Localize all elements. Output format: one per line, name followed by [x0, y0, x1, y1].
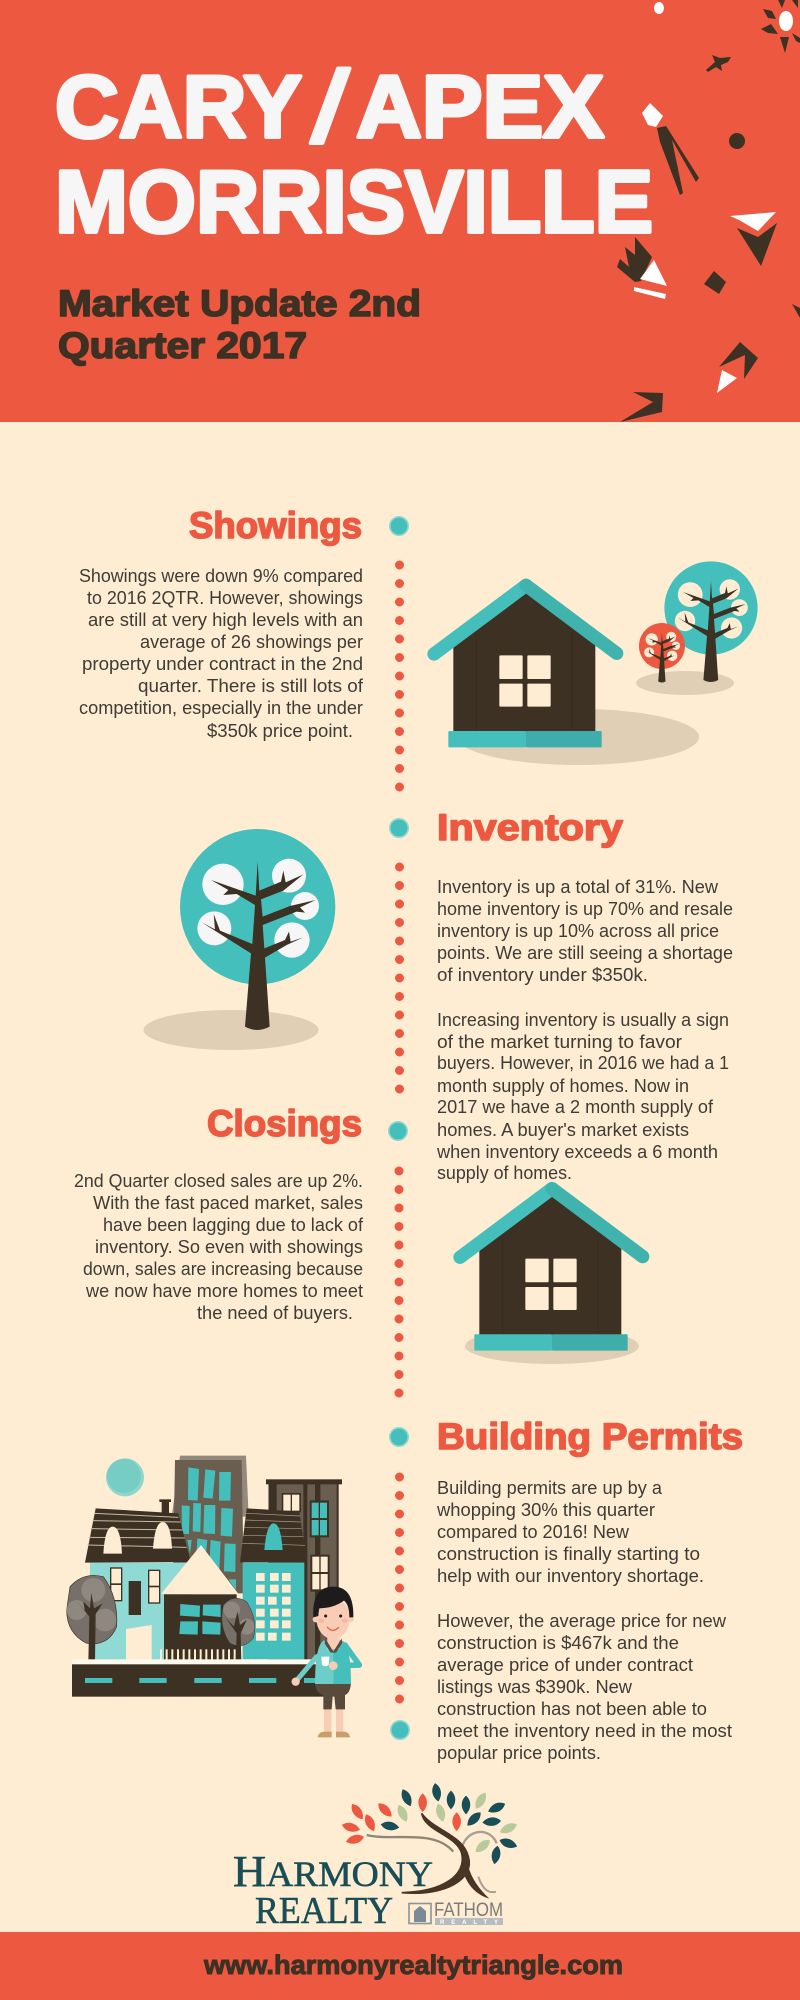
- logo wordmark: REALTY: [255, 1890, 393, 1932]
- heading: showings: Showings: [189, 505, 362, 546]
- text: inventory body: when inventory exceeds a 6 month: [436, 1141, 718, 1162]
- fathom realty badge: FATHOM: [434, 1900, 503, 1921]
- fathom realty badge: REALTY: [440, 1920, 498, 1926]
- title: CARY: [55, 57, 302, 156]
- text: showings body: average of 26 showings per: [140, 631, 363, 652]
- text: building permits body: whopping 30% this quarter: [436, 1499, 655, 1520]
- logo wordmark: [233, 1847, 433, 1932]
- text: building permits body: help with our inventory shortage.: [437, 1565, 704, 1586]
- panel: building permits: [436, 1416, 743, 1763]
- text: showings body: quarter. There is still lots of: [138, 675, 364, 696]
- text: building permits body: [436, 1477, 732, 1763]
- illustration: house with shadow: [434, 585, 699, 765]
- logo wordmark: HARMONY: [233, 1847, 433, 1896]
- logo: harmony realty: [233, 1782, 519, 1932]
- text: building permits body: construction has not been able to: [437, 1698, 707, 1719]
- heading: building permits: Building Permits: [437, 1416, 743, 1457]
- heading: closings: Closings: [207, 1103, 362, 1144]
- text: closings body: With the fast paced market, sales: [93, 1192, 363, 1213]
- tower: [172, 1456, 249, 1593]
- text: inventory body: inventory is up 10% across all price: [437, 920, 719, 941]
- text: closings body: inventory. So even with showings: [95, 1236, 363, 1257]
- heading: inventory: Inventory: [437, 807, 623, 848]
- teal building: [240, 1508, 307, 1659]
- text: closings body: we now have more homes to meet: [85, 1280, 363, 1301]
- illustration: large tree: [144, 829, 335, 1050]
- center house: [160, 1545, 239, 1660]
- title: [55, 52, 653, 251]
- panel: closings: [74, 1103, 364, 1323]
- panel: inventory: [436, 807, 733, 1183]
- text: showings body: are still at very high levels with an: [88, 609, 363, 630]
- text: closings body: the need of buyers.: [197, 1302, 353, 1323]
- text: inventory body: of inventory under $350k.: [437, 964, 648, 985]
- gray trees: [67, 1575, 255, 1662]
- panel: showings: [79, 505, 364, 741]
- illustration: two small trees: [636, 561, 758, 695]
- tall building: [266, 1479, 342, 1660]
- text: closings body: 2nd Quarter closed sales are up 2%.: [74, 1170, 363, 1191]
- text: closings body: down, sales are increasing because: [83, 1258, 363, 1279]
- timeline: dotted red line with teal markers: [389, 517, 409, 1739]
- text: showings body: $350k price point.: [207, 720, 353, 741]
- text: closings body: have been lagging due to lack of: [103, 1214, 364, 1235]
- subtitle: Quarter 2017: [58, 325, 307, 366]
- decorative confetti shapes: [617, 0, 800, 422]
- illustration: second house: [460, 1189, 643, 1364]
- text: inventory body: buyers. However, in 2016 we had a 1: [437, 1052, 729, 1073]
- text: building permits body: construction is finally starting to: [437, 1543, 700, 1564]
- footer band: [0, 1932, 800, 2000]
- text: showings body: property under contract in the 2nd: [82, 653, 363, 674]
- person: [291, 1587, 359, 1737]
- subtitle: Market Update 2nd: [58, 283, 421, 324]
- header panel: [0, 0, 800, 422]
- logo tree: [341, 1782, 519, 1899]
- text: inventory body: Inventory is up a total of 31%. New: [437, 876, 719, 897]
- illustration: city street with person: [67, 1456, 359, 1737]
- text: inventory body: points. We are still seeing a shortage: [437, 942, 733, 963]
- title: MORRISVILLE: [55, 152, 653, 251]
- text: inventory body: Increasing inventory is usually a sign: [437, 1009, 729, 1030]
- text: inventory body: of the market turning to favor: [437, 1031, 682, 1052]
- text: building permits body: average price of under contract: [437, 1654, 693, 1675]
- text: building permits body: meet the inventory need in the most: [437, 1720, 732, 1741]
- text: inventory body: month supply of homes. Now in: [437, 1075, 689, 1096]
- title: APEX: [356, 57, 604, 156]
- text: inventory body: home inventory is up 70% and resale: [437, 898, 733, 919]
- text: showings body: Showings were down 9% compared: [79, 565, 363, 586]
- sun: [106, 1458, 144, 1496]
- light teal house: [85, 1499, 193, 1660]
- text: building permits body: listings was $390k. New: [437, 1676, 633, 1697]
- text: building permits body: compared to 2016! New: [437, 1521, 630, 1542]
- text: building permits body: However, the average price for new: [437, 1610, 727, 1631]
- text: inventory body: homes. A buyer's market exists: [437, 1119, 689, 1140]
- road: [72, 1659, 327, 1697]
- title: /: [306, 52, 354, 163]
- text: building permits body: construction is $467k and the: [437, 1632, 679, 1653]
- text: inventory body: [436, 876, 733, 1183]
- text: inventory body: supply of homes.: [437, 1162, 572, 1183]
- text: showings body: competition, especially in the under: [79, 697, 363, 718]
- subtitle: [58, 283, 421, 366]
- text: building permits body: popular price points.: [437, 1742, 601, 1763]
- text: building permits body: Building permits are up by a: [437, 1477, 663, 1498]
- text: closings body: [74, 1170, 364, 1323]
- text: inventory body: 2017 we have a 2 month supply of: [437, 1096, 714, 1117]
- website url: www.harmonyrealtytriangle.com: [203, 1950, 623, 1980]
- text: showings body: to 2016 2QTR. However, showings: [87, 587, 363, 608]
- fathom realty badge: [409, 1900, 503, 1926]
- text: showings body: [79, 565, 364, 741]
